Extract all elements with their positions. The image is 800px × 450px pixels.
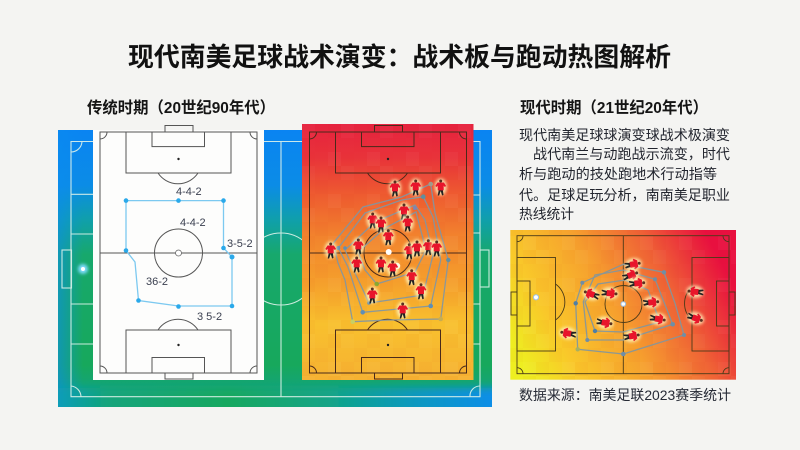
panel: running heatmap pitch: [302, 124, 474, 380]
text block: modern description: 现代南美足球球演变球战术极演变: [519, 127, 730, 143]
green field background: [58, 130, 492, 407]
small players: [558, 257, 706, 343]
text block: modern description: 代。足球足玩分析，南南美足职业: [519, 187, 730, 203]
panel: modern heatmap: [510, 230, 736, 380]
formation labels: 3-5-2: [227, 238, 253, 250]
text block: modern description: 热线统计: [519, 206, 574, 222]
text block: modern description: 析与跑动的技处跑地术行动指等: [519, 166, 717, 182]
data source note: 数据来源：南美足联2023赛季统计: [519, 387, 731, 403]
small contour nodes: [574, 270, 686, 356]
field line markings: [62, 142, 489, 397]
small pitch lines: [511, 236, 735, 374]
glowing ball on green field: [78, 264, 88, 274]
formation labels: 4-4-2: [180, 217, 206, 229]
title: 现代南美足球战术演变：战术板与跑动热图解析: [128, 42, 671, 72]
centre and penalty spots: [176, 158, 182, 346]
contour nodes: [336, 182, 450, 324]
text block: modern description: [519, 127, 730, 222]
formation labels: 4-4-2: [176, 186, 202, 198]
balls: [386, 249, 400, 269]
heading: traditional period: 传统时期（20世纪90年代）: [87, 98, 275, 117]
movement contour lines: [333, 184, 448, 322]
small white dots: [533, 295, 626, 306]
heatmap pitch lines: [310, 126, 466, 379]
formation labels: 3 5-2: [197, 311, 222, 323]
formation line: [124, 198, 234, 309]
players: [325, 178, 447, 318]
panel: traditional tactics board: [93, 126, 264, 380]
formation labels: [146, 186, 253, 323]
heading: modern period: 现代时期（21世纪20年代）: [520, 98, 708, 117]
text block: modern description: 战代南兰与动跑战示流变，时代: [533, 146, 730, 162]
spots: [387, 158, 389, 346]
pitch lines: [100, 126, 257, 379]
formation labels: 36-2: [146, 276, 168, 288]
small contour lines: [576, 264, 684, 354]
